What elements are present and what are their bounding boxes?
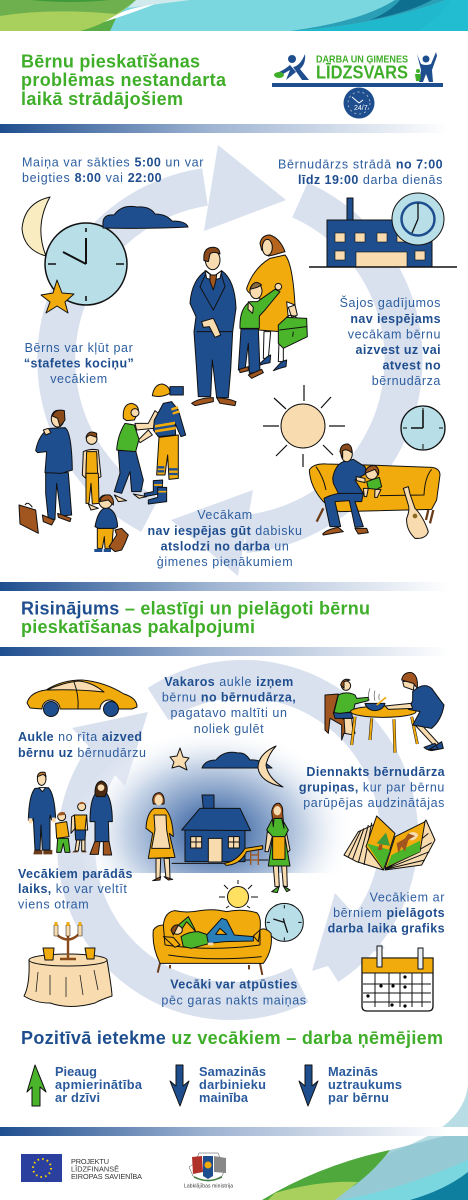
icon: clock	[401, 406, 445, 450]
text: nanny morning	[18, 730, 147, 760]
figure: mother with boy and briefcase	[238, 235, 307, 378]
heading: solution: Risinājums – elastīgi un pielāgoti bērnu	[21, 598, 370, 618]
text: adapted schedule: bērniem pielāgots	[333, 906, 445, 920]
title: laikā strādājošiem	[21, 89, 183, 109]
text: less worry	[328, 1064, 402, 1105]
text: no rest: atslodzi no darba un	[161, 540, 289, 554]
text: kindergarten hours	[278, 158, 443, 187]
title: Bērnu pieskatīšanas	[21, 52, 200, 72]
text: shift times	[22, 156, 204, 185]
text: less worry: Mazinās	[328, 1064, 378, 1079]
text: kindergarten hours: līdz 19:00 darba dienās	[298, 173, 443, 187]
figure: girl with apron	[265, 803, 290, 893]
text: overnight groups: grupiņas, kur par bērnu	[299, 780, 445, 794]
icon: moon, night clock, star, cloud	[22, 197, 188, 313]
text: nanny morning: bērnu uz bērnudārzu	[18, 746, 147, 760]
text: right block, no possibility: Šajos gadījumos	[340, 295, 441, 310]
text: relay baton: vecākiem	[50, 372, 108, 386]
text: right block, no possibility: aizvest uz vai	[355, 343, 441, 357]
text: satisfaction: apmierinātība	[55, 1077, 143, 1092]
logo: Latvian coat of arms	[184, 1153, 233, 1190]
text: EU co-funding: EIROPAS SAVIENĪBA	[71, 1172, 142, 1181]
text: nanny morning: Aukle no rīta aizved	[18, 730, 142, 744]
text: relay baton: “stafetes kociņu”	[24, 356, 134, 370]
divider bar	[0, 647, 468, 656]
icon: car	[27, 680, 137, 716]
text: rest after night shift: pēc garas nakts maiņas	[161, 994, 307, 1008]
logo: darba un gimenes lidzsvars: 24/7	[354, 105, 368, 112]
icon: up arrow	[27, 1065, 46, 1106]
text: nanny evening	[162, 675, 296, 736]
text: right block, no possibility: atvest no	[383, 358, 441, 372]
text: rest after night shift	[161, 978, 307, 1008]
icon: down arrow	[299, 1065, 318, 1106]
logo: darba un gimenes lidzsvars	[272, 52, 443, 118]
heading: solution	[21, 598, 370, 637]
text: rest after night shift: Vecāki var atpūsties	[170, 978, 298, 992]
background glow around house	[98, 741, 336, 873]
text: nanny evening: Vakaros aukle izņem	[164, 675, 294, 689]
text: right block, no possibility	[340, 295, 441, 388]
text: right block, no possibility: vecākam bērnu	[348, 328, 441, 342]
text: nanny evening: bērnu no bērnudārza,	[162, 690, 296, 704]
icon: calendar	[362, 946, 433, 1011]
text: staff turnover: mainība	[199, 1090, 249, 1105]
icon: down arrow	[170, 1065, 189, 1106]
text: nanny evening: pagatavo maltīti un	[170, 706, 288, 720]
divider bar	[0, 124, 468, 133]
figure: parent resting on sofa	[153, 910, 271, 975]
text: overnight groups: parūpējas audzinātājas	[303, 796, 445, 810]
text: overnight groups: Diennakts bērnudārza	[306, 765, 446, 779]
text: EU co-funding	[71, 1157, 142, 1181]
text: relay baton	[24, 341, 134, 386]
text: right block, no possibility: nav iespējams	[350, 312, 441, 326]
text: EU co-funding: LĪDZFINANSĒ	[71, 1164, 119, 1174]
text: staff turnover: darbinieku	[199, 1077, 266, 1092]
text: adapted schedule: Vecākiem ar	[370, 890, 445, 904]
text: adapted schedule	[328, 890, 445, 936]
text: overnight groups	[299, 765, 446, 810]
figure: child eating, woman at table	[325, 673, 444, 753]
icon: kindergarten factory with clock	[309, 193, 457, 267]
title	[21, 52, 227, 109]
heading: positive impact: Pozitīvā ietekme uz vecākiem – darba ņēmējiem	[21, 1028, 443, 1048]
title: problēmas nestandarta	[21, 70, 227, 90]
text: less worry: par bērnu	[328, 1090, 389, 1105]
logo: darba un gimenes lidzsvars: LĪDZSVARS	[316, 62, 408, 82]
icon: house with slide	[172, 795, 268, 865]
text: kindergarten hours: Bērnudārzs strādā no 7:00	[278, 158, 443, 172]
figure: father in suit	[190, 247, 236, 406]
text: shift times: Maiņa var sākties 5:00 un var	[22, 156, 204, 170]
icon: clock	[265, 903, 303, 941]
logo: Latvian coat of arms: Labklājības ministrija	[184, 1184, 233, 1190]
figure: family of four	[28, 772, 112, 855]
figure: father with baby on sofa, guitar	[309, 444, 440, 538]
text: nanny evening: noliek gulēt	[194, 722, 264, 736]
text: shift times: beigties 8:00 vai 22:00	[22, 171, 162, 185]
text: no rest: ģimenes pienākumiem	[157, 555, 293, 569]
header wave band	[0, 0, 468, 31]
divider bar	[0, 1127, 468, 1136]
background cycle arrows: problem	[56, 145, 404, 576]
text: no rest: nav iespējas gūt dabisku	[147, 524, 303, 538]
figures: father leaving, child, mother, firefighter uniform	[19, 384, 186, 552]
text: right block, no possibility: bērnudārza	[372, 374, 441, 388]
text: satisfaction	[55, 1064, 143, 1105]
text: staff turnover	[199, 1064, 266, 1105]
text: parents have time	[18, 867, 133, 912]
icon: open book	[344, 816, 435, 870]
background cycle arrows: solution	[72, 679, 399, 1001]
logo: darba un gimenes lidzsvars: DARBA UN ĢIMENES	[316, 54, 408, 66]
text: relay baton: Bērns var kļūt par	[25, 341, 133, 355]
text: no rest	[147, 508, 303, 569]
text: staff turnover: Samazinās	[199, 1064, 266, 1079]
text: parents have time: Vecākiem parādās	[18, 867, 133, 881]
heading: solution: pieskatīšanas pakalpojumi	[21, 617, 255, 637]
text: no rest: Vecākam	[197, 508, 253, 522]
text: satisfaction: Pieaug	[55, 1064, 97, 1079]
icon: star, cloud, moon	[170, 746, 283, 787]
icon: candle table	[24, 922, 112, 1006]
figure: nanny with apron	[146, 793, 175, 881]
text: parents have time: viens otram	[18, 898, 89, 912]
footer wave	[262, 1085, 468, 1200]
icon: sun behind sofa	[219, 880, 258, 908]
icon: sun	[263, 385, 345, 467]
divider bar	[0, 582, 468, 591]
logo: EU flag	[21, 1154, 62, 1182]
text: satisfaction: ar dzīvi	[55, 1090, 100, 1105]
text: EU co-funding: PROJEKTU	[71, 1157, 109, 1166]
text: parents have time: laiks, ko var veltīt	[18, 882, 127, 896]
text: adapted schedule: darba laika grafiks	[328, 922, 445, 936]
text: less worry: uztraukums	[328, 1077, 402, 1092]
